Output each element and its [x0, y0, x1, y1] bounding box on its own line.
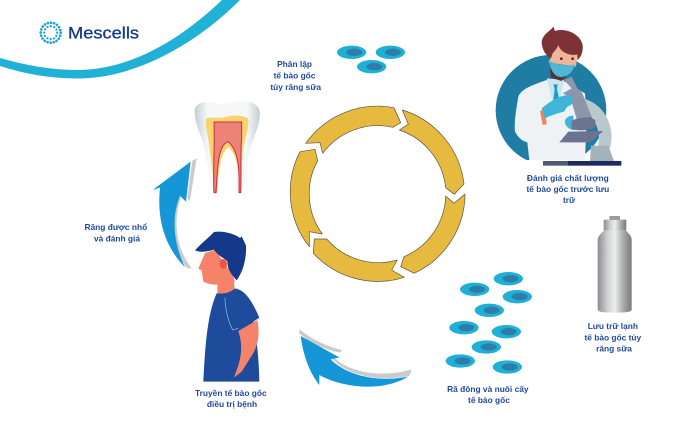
ring segment: left [290, 149, 322, 247]
label: thaw and culture: tế bào gốc [468, 395, 510, 405]
arrow body [301, 336, 408, 387]
tie [553, 84, 559, 107]
ring segment: top right [399, 110, 464, 194]
neck [217, 275, 235, 295]
label: isolation: Phân lập [277, 59, 312, 69]
label: treatment: Truyền tế bào gốc [195, 388, 267, 398]
label: isolation: tủy răng sữa [270, 82, 321, 92]
cycle ring [290, 106, 465, 281]
arrow: lower, to patient [299, 329, 412, 387]
face [548, 45, 577, 67]
patient boy [195, 232, 259, 382]
bottle [598, 216, 632, 313]
microscope head [572, 118, 595, 130]
cell [357, 60, 386, 73]
arrow: upper, to tooth [153, 158, 197, 268]
cell [492, 325, 521, 338]
microscope base [543, 161, 621, 166]
label: tooth extraction: và đánh giá [94, 234, 140, 244]
glove upper [542, 95, 573, 118]
ring segment: lower right [401, 194, 465, 273]
label: quality check: trữ [563, 195, 576, 205]
cell [503, 290, 532, 303]
pulp [214, 122, 242, 193]
face mask [549, 61, 575, 77]
label: cold storage: răng sữa [596, 344, 632, 354]
forearm [540, 109, 547, 125]
cell [494, 272, 523, 285]
arrow shadow [172, 158, 197, 268]
culture cells group [446, 272, 532, 374]
label: tooth extraction: Răng được nhổ [84, 222, 147, 232]
label: quality check: tế bào gốc trước lưu [526, 184, 609, 194]
shirt [547, 78, 564, 108]
label: cold storage: tế bào gốc tủy [584, 332, 642, 342]
arrow shadow [299, 329, 412, 378]
neck [550, 68, 567, 81]
scientist illustration [496, 27, 621, 166]
logo wordmark: Mescells [68, 24, 139, 42]
logo icon [41, 23, 61, 43]
header swoosh [0, 0, 240, 78]
microscope foot [590, 146, 614, 161]
shirt seam [225, 298, 238, 330]
top cells group [337, 46, 405, 73]
label: cold storage: Lưu trữ lạnh [588, 321, 638, 331]
logo [41, 23, 139, 43]
arm [234, 320, 259, 378]
eyes [560, 57, 574, 60]
cell [493, 360, 522, 374]
glove lower [565, 116, 574, 130]
enamel [195, 101, 260, 193]
label: isolation: tế bào gốc [274, 70, 316, 80]
label: quality check: Đánh giá chất lượng [527, 173, 609, 183]
cell [472, 340, 501, 354]
ear [220, 259, 227, 269]
ring segment: top left [306, 106, 401, 153]
hair [542, 27, 583, 60]
arrow body [153, 162, 191, 267]
tooth [195, 101, 260, 193]
microscope stage [559, 131, 603, 142]
cell [337, 46, 366, 59]
bottle neck [604, 220, 626, 230]
head [195, 232, 246, 285]
microscope arm [581, 99, 612, 150]
microscope tube [563, 77, 592, 121]
cell [449, 321, 479, 334]
backdrop circle [496, 55, 606, 166]
bottle cap [609, 216, 620, 220]
cell [446, 354, 475, 368]
lab coat [515, 80, 587, 160]
label: thaw and culture: Rã đông và nuôi cấy [447, 384, 529, 394]
hair [195, 232, 246, 280]
cell [376, 46, 405, 59]
label: treatment: điều trị bệnh [207, 399, 257, 409]
dentin [206, 116, 248, 193]
cell [475, 304, 504, 317]
shirt [203, 288, 259, 382]
ring segment: bottom [313, 239, 404, 281]
bottle body [598, 230, 632, 313]
face [198, 250, 235, 285]
cell [460, 283, 489, 296]
